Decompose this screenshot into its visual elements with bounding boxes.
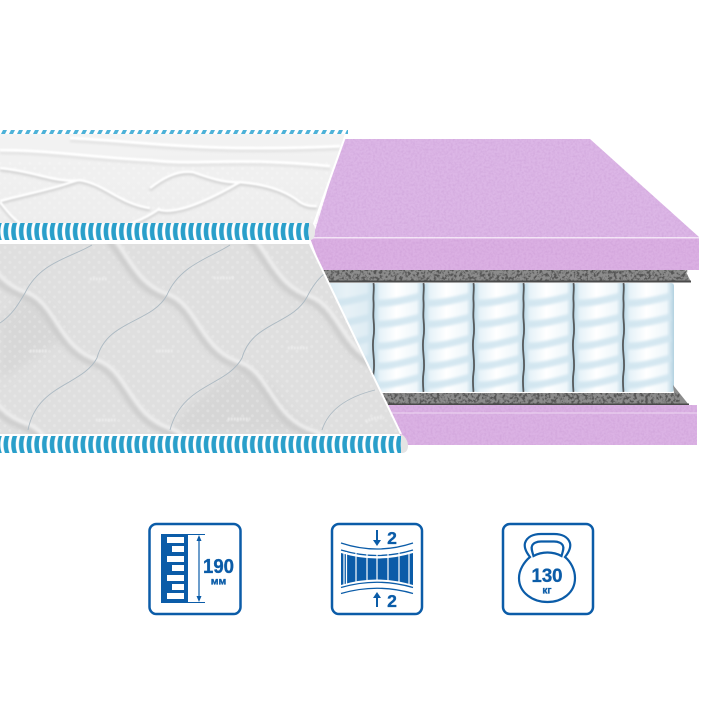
kettlebell: [519, 534, 575, 602]
middle piping: [0, 223, 315, 240]
load unit: кг: [542, 586, 552, 596]
icon frame: [503, 524, 593, 614]
upper curves: [341, 543, 413, 556]
top layer count: 2: [387, 528, 397, 548]
quilt stitch highlights: [0, 244, 362, 434]
foam grain texture: [305, 139, 700, 271]
lower cover surface: [0, 244, 400, 434]
icon: mattress height 190 mm: [150, 524, 240, 614]
lower curves: [341, 582, 413, 594]
icon: maximum load 130 kg: [503, 524, 593, 614]
height value: 190: [203, 556, 234, 578]
mattress cross-section: [305, 139, 700, 446]
icon: spring block with 2 cm foam on both sides: [332, 524, 422, 614]
layered mattress side: [161, 534, 188, 603]
top piping thin: [0, 130, 348, 134]
quilted cover: [0, 130, 408, 453]
pocket springs: [324, 283, 674, 392]
lower felt layer: [370, 385, 689, 406]
icon frame: [150, 524, 240, 614]
height arrow: [188, 534, 205, 602]
upper cover surface: [0, 134, 346, 230]
load value: 130: [532, 565, 563, 587]
lower cover right edge: [310, 244, 401, 434]
upper cover right edge: [314, 134, 346, 224]
darker quilt cells: [0, 293, 65, 380]
top foam layer surface: [313, 139, 699, 237]
height unit: мм: [211, 576, 226, 588]
ascending stitches: [0, 245, 375, 430]
top foam layer front face: [310, 238, 699, 270]
quilt stitch shadows: [0, 244, 367, 434]
embossed logos: [30, 278, 384, 422]
down arrow: [373, 530, 381, 546]
top foam edge highlight: [312, 237, 699, 239]
spring block: [341, 552, 413, 586]
bottom layer count: 2: [387, 591, 397, 611]
bottom foam layer: [385, 405, 698, 446]
up arrow: [373, 592, 381, 607]
bottom piping: [0, 434, 408, 453]
upper felt layer: [320, 270, 691, 282]
icon frame: [332, 524, 422, 614]
